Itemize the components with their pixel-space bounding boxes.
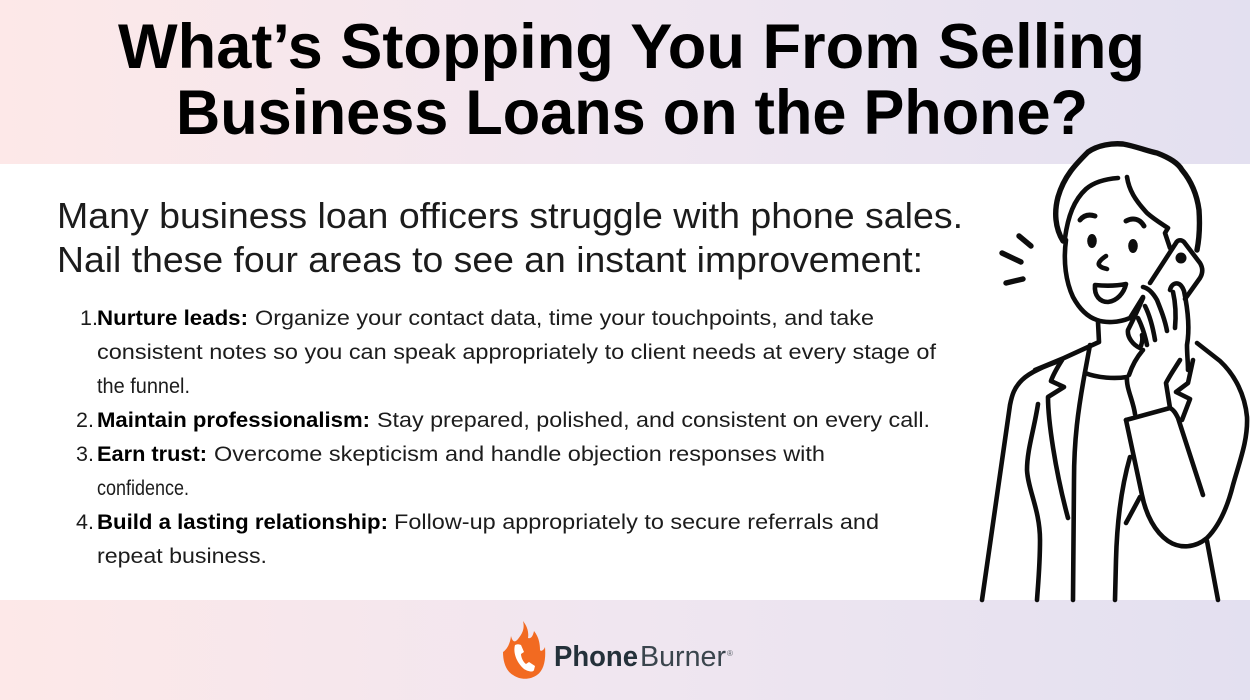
nose bbox=[1099, 256, 1107, 269]
footer band bbox=[0, 600, 1250, 700]
item 3: earn trust bbox=[76, 442, 825, 500]
hair fill and face bbox=[1055, 144, 1200, 322]
item 4: build a lasting relationship: repeat business. bbox=[97, 544, 267, 568]
item 1: nurture leads: Organize your contact data, time your touchpoints, and take bbox=[255, 306, 874, 330]
item 3: earn trust: 3. bbox=[76, 442, 94, 466]
illustration: woman on the phone bbox=[982, 144, 1247, 600]
intro text: Many business loan officers struggle with phone sales. bbox=[57, 195, 963, 236]
icon: flame with handset bbox=[503, 621, 545, 679]
item 2: maintain professionalism: 2. bbox=[76, 408, 94, 432]
phone bbox=[1150, 240, 1202, 299]
hand bbox=[1128, 283, 1188, 375]
numbered list bbox=[76, 306, 936, 568]
item 2: maintain professionalism: Maintain professionalism: bbox=[97, 408, 370, 432]
sound lines bbox=[1002, 236, 1031, 283]
logo: PhoneBurner: Burner bbox=[640, 641, 726, 673]
item 1: nurture leads: the funnel. bbox=[97, 374, 190, 398]
item 3: earn trust: Overcome skepticism and handle objection responses with bbox=[214, 442, 825, 466]
logo: PhoneBurner: ® bbox=[727, 649, 733, 658]
title bbox=[118, 12, 1145, 148]
item 1: nurture leads: Nurture leads: bbox=[97, 306, 248, 330]
neck and shirt bbox=[1035, 322, 1135, 600]
item 4: build a lasting relationship: Build a lasting relationship: bbox=[97, 510, 388, 534]
intro text bbox=[57, 195, 963, 280]
item 3: earn trust: Earn trust: bbox=[97, 442, 207, 466]
sleeve bbox=[1126, 343, 1247, 546]
face outline bbox=[1065, 240, 1143, 322]
title: Business Loans on the Phone? bbox=[176, 78, 1088, 148]
eyes bbox=[1087, 234, 1138, 253]
item 1: nurture leads bbox=[80, 306, 936, 398]
header band bbox=[0, 0, 1250, 164]
item 2: maintain professionalism bbox=[76, 408, 930, 432]
title: What’s Stopping You From Selling bbox=[118, 12, 1145, 82]
item 3: earn trust: confidence. bbox=[97, 476, 189, 500]
eyebrows bbox=[1080, 215, 1095, 220]
logo: PhoneBurner bbox=[503, 621, 733, 679]
item 1: nurture leads: 1. bbox=[80, 306, 98, 330]
intro text: Nail these four areas to see an instant improvement: bbox=[57, 239, 923, 280]
item 1: nurture leads: consistent notes so you can speak appropriately to client needs at every stage of bbox=[97, 340, 936, 364]
item 4: build a lasting relationship: Follow-up appropriately to secure referrals and bbox=[394, 510, 879, 534]
item 4: build a lasting relationship bbox=[76, 510, 879, 568]
wordmark: Phone bbox=[554, 641, 638, 673]
item 4: build a lasting relationship: 4. bbox=[76, 510, 94, 534]
mouth bbox=[1095, 284, 1126, 302]
jacket bbox=[982, 360, 1218, 600]
item 2: maintain professionalism: Stay prepared, polished, and consistent on every call. bbox=[377, 408, 930, 432]
